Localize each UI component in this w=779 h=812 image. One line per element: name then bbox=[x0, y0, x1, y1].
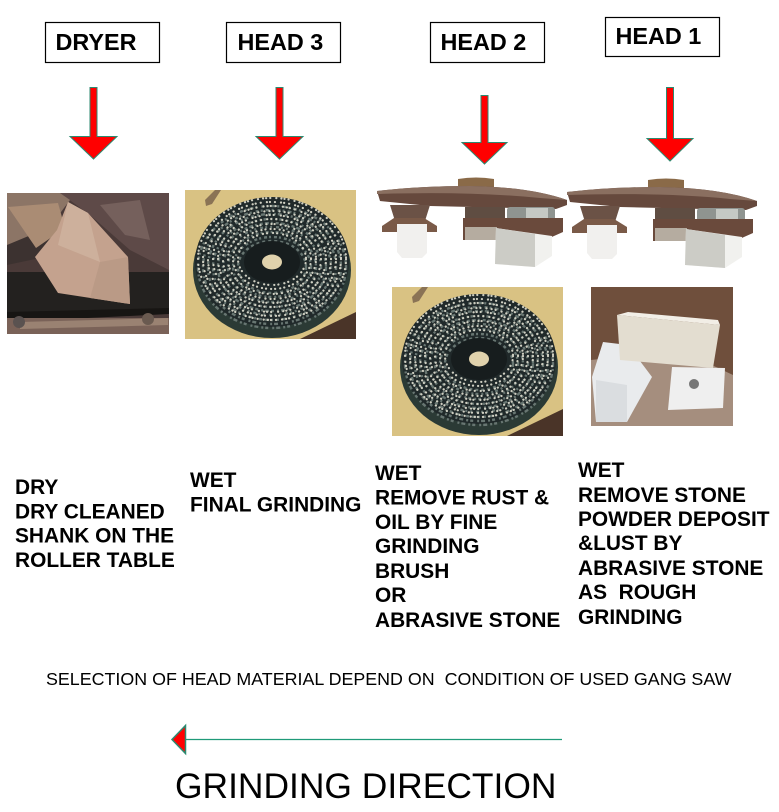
photo: dryer shank bbox=[7, 193, 169, 334]
label: HEAD 1: HEAD 1 bbox=[616, 23, 701, 49]
text: head 3 description: WET bbox=[190, 469, 237, 492]
text: head 2 description: WET bbox=[375, 462, 422, 485]
text: dryer description: DRY CLEANED bbox=[15, 500, 165, 524]
heading: grinding direction: GRINDING DIRECTION bbox=[175, 766, 556, 806]
text: head 2 description: OIL BY FINE bbox=[375, 511, 497, 534]
label: DRYER: DRYER bbox=[56, 29, 137, 55]
text: head 1 description: &LUST BY bbox=[578, 532, 683, 555]
label: HEAD 2: HEAD 2 bbox=[440, 29, 526, 55]
label: HEAD 2 bbox=[430, 22, 544, 62]
arrow: dryer down bbox=[70, 88, 117, 159]
text: dryer description: ROLLER TABLE bbox=[15, 549, 175, 572]
text: head 2 description bbox=[375, 462, 560, 632]
text: head 1 description: WET bbox=[578, 459, 625, 482]
text: dryer description: DRY bbox=[15, 476, 58, 499]
photo: head 3 brush bbox=[185, 190, 356, 339]
arrow: head 3 down bbox=[256, 88, 303, 159]
photo: head 1 grinding head bbox=[567, 178, 757, 268]
text: head 1 description bbox=[578, 459, 770, 629]
photo: head 1 abrasive stones bbox=[591, 287, 733, 426]
photo: head 2 grinding head bbox=[377, 178, 567, 267]
label: HEAD 3 bbox=[226, 22, 340, 62]
arrow: grinding direction bbox=[172, 726, 562, 754]
label: DRYER bbox=[46, 22, 160, 62]
text: head 1 description: REMOVE STONE bbox=[578, 484, 746, 507]
text: head 3 description bbox=[190, 469, 361, 516]
text: head 2 description: BRUSH bbox=[375, 560, 449, 583]
label: HEAD 1 bbox=[606, 18, 720, 56]
text: head 2 description: REMOVE RUST & bbox=[375, 486, 549, 510]
label: HEAD 3: HEAD 3 bbox=[238, 29, 323, 55]
arrow: head 1 down bbox=[647, 88, 693, 161]
text: head 3 description: FINAL GRINDING bbox=[190, 494, 361, 516]
text: dryer description: SHANK ON THE bbox=[15, 524, 174, 548]
text: head 2 description: GRINDING bbox=[375, 535, 479, 558]
note: head material selection: SELECTION OF HEAD MATERIAL DEPEND ON CONDITION OF USED GANG SAW bbox=[46, 669, 732, 689]
text: head 1 description: GRINDING bbox=[578, 606, 682, 629]
text: head 2 description: OR bbox=[375, 584, 406, 607]
text: head 1 description: POWDER DEPOSIT bbox=[578, 508, 770, 531]
photo: head 2 brush bbox=[392, 287, 563, 436]
text: head 2 description: ABRASIVE STONE bbox=[375, 609, 560, 632]
text: head 1 description: AS ROUGH bbox=[578, 581, 696, 604]
arrow: head 2 down bbox=[462, 96, 507, 164]
text: dryer description bbox=[15, 476, 175, 572]
text: head 1 description: ABRASIVE STONE bbox=[578, 557, 763, 580]
